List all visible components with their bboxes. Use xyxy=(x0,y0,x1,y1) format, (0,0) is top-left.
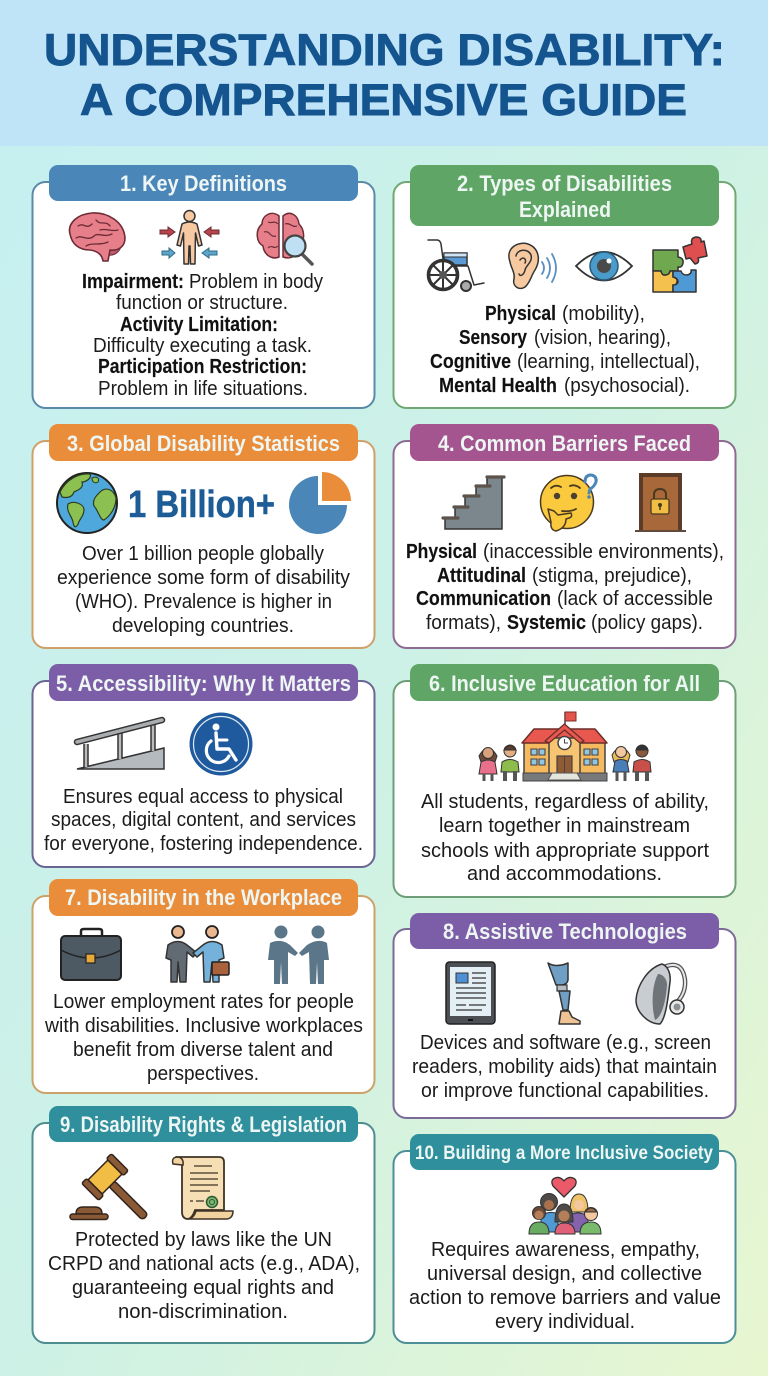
icon: stairs xyxy=(443,477,504,529)
panel 3 heading: 3. Global Disability Statistics xyxy=(67,431,340,456)
panel 10 text: Requires awareness, empathy, xyxy=(431,1238,700,1261)
icon: person with arrows xyxy=(160,210,219,264)
panel 3 heading xyxy=(49,424,358,461)
icon: brain with magnifier xyxy=(257,213,312,264)
panel 10 text xyxy=(409,1238,721,1333)
panel 2 text: (psychosocial). xyxy=(564,374,690,397)
panel 8: assistive technologies xyxy=(394,913,736,1118)
panel 5 heading xyxy=(49,664,358,701)
panel 2 text: Mental Health xyxy=(439,374,557,397)
icon: wheelchair xyxy=(428,240,484,291)
panel 4 heading xyxy=(410,424,719,461)
icon: locked door xyxy=(635,473,686,531)
icon: globe xyxy=(57,473,117,533)
icon: tablet xyxy=(446,962,495,1024)
panel 3 text: developing countries. xyxy=(112,614,294,637)
panel 10 text: universal design, and collective xyxy=(427,1262,702,1285)
icon: thinking face xyxy=(540,475,596,531)
icon: accessibility symbol xyxy=(190,712,252,776)
panel 8 text: readers, mobility aids) that maintain xyxy=(412,1055,717,1078)
panel 5 text: spaces, digital content, and services xyxy=(51,808,356,831)
panel 4 text: (lack of accessible xyxy=(557,587,713,610)
panel 6 text: schools with appropriate support xyxy=(421,839,709,862)
panel 7 heading: 7. Disability in the Workplace xyxy=(65,885,342,910)
panel 2 text: Cognitive xyxy=(430,350,511,373)
icon: community with heart xyxy=(529,1177,601,1234)
panel 2 text: (learning, intellectual), xyxy=(517,350,700,373)
pie chart icon xyxy=(289,472,351,534)
panel 10 text: every individual. xyxy=(495,1310,635,1333)
panel 1 text: Activity Limitation: xyxy=(120,313,278,336)
panel 10 text: action to remove barriers and value xyxy=(409,1286,721,1309)
icon: school with students xyxy=(479,712,651,781)
panel 6 heading xyxy=(410,664,719,701)
panel 4 text: Systemic xyxy=(507,611,586,634)
title: UNDERSTANDING DISABILITY: xyxy=(44,26,725,75)
panel 4 text: (inaccessible environments), xyxy=(483,540,724,563)
panel 4 text xyxy=(406,540,724,634)
panel 8 heading xyxy=(410,913,719,949)
icon: ramp with handrail xyxy=(77,720,164,769)
icon: business handshake silhouettes xyxy=(268,926,329,984)
title xyxy=(44,26,725,125)
panel 7: workplace xyxy=(32,879,374,1093)
panel 2 heading: Explained xyxy=(519,197,611,222)
panel 9 text xyxy=(48,1228,360,1323)
panel 8 heading: 8. Assistive Technologies xyxy=(443,919,687,944)
panel 4 text: formats), xyxy=(426,611,501,634)
panel 4: common barriers xyxy=(394,424,736,648)
panel 7 text: benefit from diverse talent and xyxy=(73,1038,333,1061)
panel 9: rights and legislation xyxy=(32,1106,374,1343)
title: A COMPREHENSIVE GUIDE xyxy=(80,76,687,125)
panel 6 heading: 6. Inclusive Education for All xyxy=(429,671,700,696)
panel 7 heading xyxy=(49,879,358,916)
panel 9 text: guaranteeing equal rights and xyxy=(72,1276,334,1299)
panel 2 text: Physical xyxy=(485,302,556,325)
big statistic: 1 Billion+ xyxy=(128,484,275,526)
icon: gavel xyxy=(70,1154,160,1232)
panel 9 heading: 9. Disability Rights & Legislation xyxy=(60,1112,347,1137)
panel 7 text xyxy=(44,990,363,1085)
student 1 xyxy=(479,748,497,781)
panel 6: inclusive education xyxy=(394,664,736,897)
panel 4 text: Communication xyxy=(416,587,551,610)
panel 2 heading: 2. Types of Disabilities xyxy=(457,171,672,196)
icon: ear with sound waves xyxy=(509,243,556,288)
panel 4 text: (stigma, prejudice), xyxy=(532,564,692,587)
panel 3: global statistics xyxy=(32,424,374,648)
icon: prosthetic leg xyxy=(548,963,580,1024)
student 3 xyxy=(612,746,630,781)
school building xyxy=(522,712,607,781)
panel 5 text: for everyone, fostering independence. xyxy=(44,832,363,855)
panel 9 text: CRPD and national acts (e.g., ADA), xyxy=(48,1252,360,1275)
panel 1 text: Participation Restriction: xyxy=(98,355,307,378)
panel 1 text xyxy=(82,270,324,400)
icon: briefcase xyxy=(61,929,121,980)
icon: legal scroll xyxy=(173,1157,233,1219)
panel 6 text: and accommodations. xyxy=(467,862,662,885)
panel 8 text xyxy=(412,1031,717,1102)
panel 3 text: Over 1 billion people globally xyxy=(82,542,325,565)
icon: hearing aid xyxy=(636,964,685,1024)
panel 4 text: Attitudinal xyxy=(437,564,526,587)
panel 5 heading: 5. Accessibility: Why It Matters xyxy=(56,671,351,696)
panel 6 text: learn together in mainstream xyxy=(439,814,690,837)
icon: puzzle pieces xyxy=(653,237,707,292)
panel 8 text: Devices and software (e.g., screen xyxy=(420,1031,711,1054)
panel 1 text: Impairment: xyxy=(82,270,184,293)
panel 4 text: (policy gaps). xyxy=(591,611,703,634)
panel 9 text: Protected by laws like the UN xyxy=(75,1228,332,1251)
panel 2 heading xyxy=(410,165,719,226)
panel 6 text: All students, regardless of ability, xyxy=(421,790,709,813)
panel 7 text: Lower employment rates for people xyxy=(53,990,354,1013)
panel 1 text: Problem in life situations. xyxy=(98,377,308,400)
student 4 xyxy=(633,745,651,781)
panel 3 text xyxy=(57,542,351,637)
panel 2: types of disabilities xyxy=(394,165,736,408)
panel 2 text: Sensory xyxy=(459,326,527,349)
icon: brain xyxy=(70,213,125,261)
panel 6 text xyxy=(421,790,709,885)
panel 5 text xyxy=(44,785,363,855)
panel 2 text xyxy=(430,302,700,397)
panel 4 text: Physical xyxy=(406,540,477,563)
panel 10 heading: 10. Building a More Inclusive Society xyxy=(415,1142,713,1164)
panel 7 text: with disabilities. Inclusive workplaces xyxy=(44,1014,363,1037)
icon: handshake with briefcase xyxy=(166,926,229,982)
panel 1 heading xyxy=(49,165,358,201)
panel 4 heading: 4. Common Barriers Faced xyxy=(438,431,691,456)
panel 2 text: (vision, hearing), xyxy=(534,326,671,349)
panel 5: accessibility xyxy=(32,664,374,867)
panel 9 heading xyxy=(49,1106,358,1142)
panel 7 text: perspectives. xyxy=(147,1062,259,1085)
panel 1 heading: 1. Key Definitions xyxy=(120,171,287,196)
panel 5 text: Ensures equal access to physical xyxy=(63,785,343,808)
panel 9 text: non-discrimination. xyxy=(118,1300,288,1323)
panel 1 text: Difficulty executing a task. xyxy=(93,334,312,357)
header band xyxy=(0,0,768,146)
icon: eye xyxy=(576,252,632,280)
panel 1 text: Problem in body xyxy=(189,270,324,293)
panel 1 text: function or structure. xyxy=(116,291,288,314)
panel 8 text: or improve functional capabilities. xyxy=(421,1079,709,1102)
panel 10 heading xyxy=(410,1134,719,1170)
panel 1: key definitions xyxy=(32,165,374,408)
student 2 xyxy=(501,745,519,781)
panel 10: inclusive society xyxy=(394,1134,736,1343)
panel 3 text: (WHO). Prevalence is higher in xyxy=(75,590,332,613)
panel 2 text: (mobility), xyxy=(562,302,645,325)
panel 3 text: experience some form of disability xyxy=(57,566,351,589)
